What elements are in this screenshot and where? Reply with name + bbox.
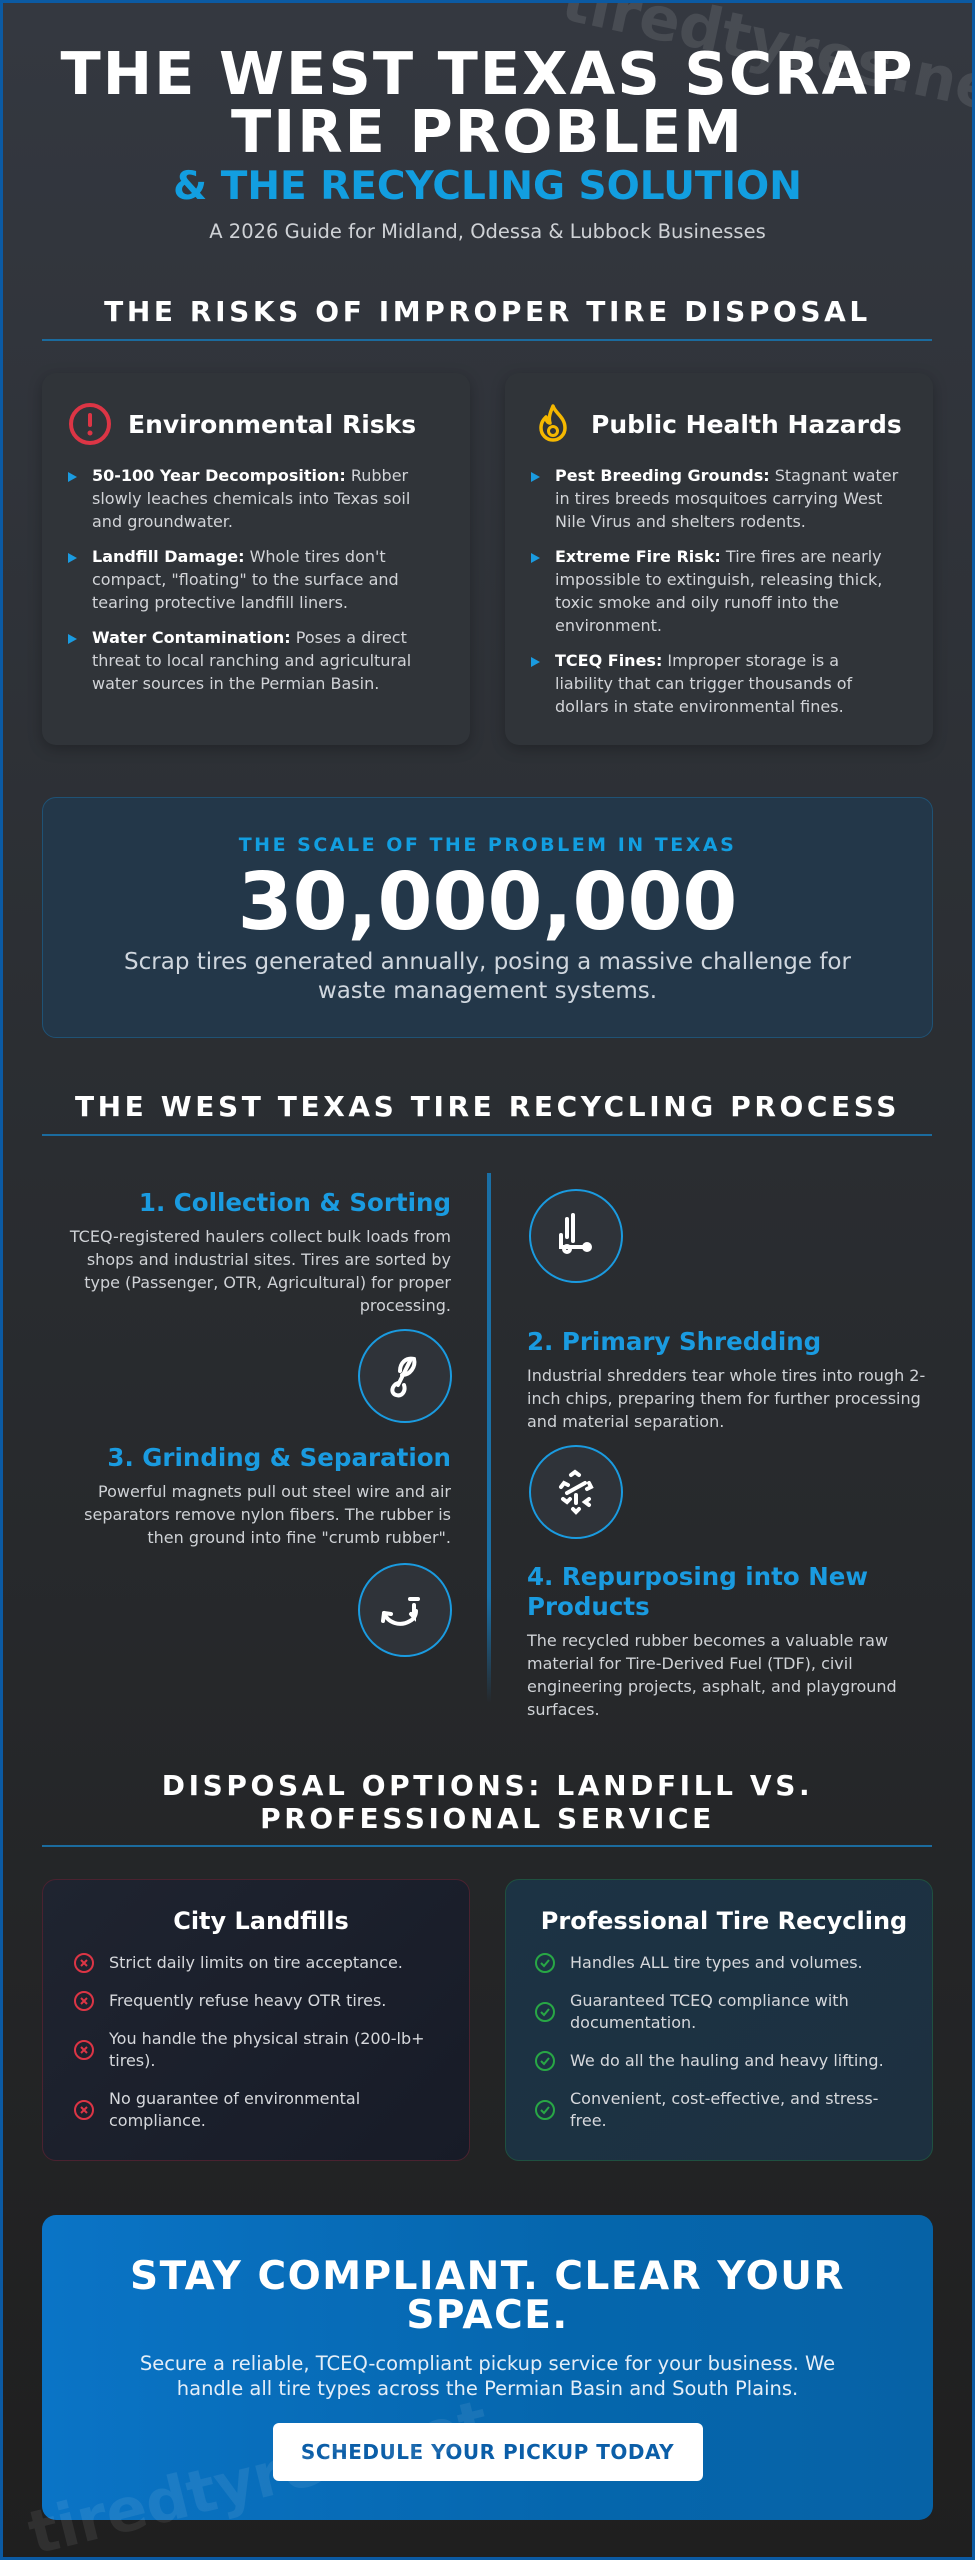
step 3: 3. Grinding & Separation (107, 1443, 451, 1472)
icon: fire (539, 404, 567, 442)
stat label: THE SCALE OF THE PROBLEM IN TEXAS (239, 834, 736, 856)
step 1 (70, 1188, 451, 1315)
step 4: The recycled rubber becomes a valuable raw material for Tire-Derived Fuel (TDF), civil engineering projects, asphalt, and playground surfaces. (527, 1631, 897, 1719)
step 4: 4. Repurposing into New Products (527, 1562, 868, 1621)
heading: environmental (69, 403, 416, 445)
step 3 (84, 1443, 451, 1547)
heading: health (539, 404, 902, 442)
icon: warning (69, 403, 111, 445)
heading: environmental: Environmental Risks (128, 410, 416, 438)
list: Frequently refuse heavy OTR tires. (109, 1991, 386, 2010)
CTA heading: STAY COMPLIANT. CLEAR YOUR SPACE. (130, 2254, 845, 2338)
subtitle blue: & THE RECYCLING SOLUTION (173, 164, 802, 209)
step 2: 2. Primary Shredding (527, 1327, 821, 1356)
list: Convenient, cost-effective, and stress-free. (570, 2089, 878, 2130)
step 1: 1. Collection & Sorting (139, 1188, 451, 1217)
heading: risks: THE RISKS OF IMPROPER TIRE DISPOSAL (104, 295, 871, 328)
tagline: A 2026 Guide for Midland, Odessa & Lubbock Businesses (209, 220, 766, 243)
bullets: 50-100 Year Decomposition: Rubber slowly leaches chemicals into Texas soil and groundwater. (92, 466, 410, 531)
CTA panel (42, 2215, 933, 2520)
bullets: Extreme Fire Risk: Tire fires are nearly impossible to extinguish, releasing thick, toxic smoke and oily runoff into the environment. (555, 547, 882, 635)
icon: separation arrows (529, 1445, 623, 1539)
step 2 (527, 1327, 925, 1431)
step 4 (526, 1562, 897, 1719)
list (535, 1953, 884, 2130)
bullets: TCEQ Fines: Improper storage is a liability that can trigger thousands of dollars in state environmental fines. (555, 651, 852, 716)
heading: process: THE WEST TEXAS TIRE RECYCLING PROCESS (75, 1090, 900, 1123)
bullets (531, 466, 898, 716)
panel: environmental risks (42, 373, 470, 745)
list: No guarantee of environmental compliance. (109, 2089, 360, 2130)
bullets: Landfill Damage: Whole tires don't compact, "floating" to the surface and tearing protective landfill liners. (92, 547, 399, 612)
step 3: Powerful magnets pull out steel wire and air separators remove nylon fibers. The rubber is then ground into fine "crumb rubber". (84, 1482, 451, 1547)
CTA button (272, 2423, 702, 2481)
step 2: Industrial shredders tear whole tires into rough 2-inch chips, preparing them for further processing and material separation. (527, 1366, 925, 1431)
stat caption: Scrap tires generated annually, posing a massive challenge for waste management systems. (124, 949, 851, 1004)
heading: Professional Tire Recycling (541, 1907, 907, 1935)
timeline line (487, 1173, 491, 1703)
panel: public health (505, 373, 933, 745)
list (74, 1953, 425, 2130)
CTA button: SCHEDULE YOUR PICKUP TODAY (301, 2440, 674, 2464)
list: Handles ALL tire types and volumes. (570, 1953, 863, 1972)
bullets: Pest Breeding Grounds: Stagnant water in tires breeds mosquitoes carrying West Nile Virus and shelters rodents. (555, 466, 898, 531)
title (60, 39, 914, 166)
list: Guaranteed TCEQ compliance with documentation. (570, 1991, 849, 2032)
stat panel (42, 797, 933, 1038)
CTA text: Secure a reliable, TCEQ-compliant pickup service for your business. We handle all tire types across the Permian Basin and South Plains. (140, 2352, 835, 2400)
step 1: TCEQ-registered haulers collect bulk loads from shops and industrial sites. Tires are sorted by type (Passenger, OTR, Agricultural) for proper processing. (70, 1227, 451, 1315)
icon: truck (529, 1189, 623, 1283)
icon: recycle leaf (358, 1329, 452, 1423)
list: You handle the physical strain (200-lb+ tires). (109, 2029, 425, 2070)
bullets (68, 466, 411, 693)
panel: professional recycling (505, 1879, 933, 2161)
title: TIRE PROBLEM (231, 97, 744, 166)
heading: disposal: DISPOSAL OPTIONS: LANDFILL VS. PROFESSIONAL SERVICE (162, 1769, 813, 1835)
stat number: 30,000,000 (238, 856, 737, 948)
heading: health: Public Health Hazards (591, 410, 902, 438)
title: THE WEST TEXAS SCRAP (60, 39, 914, 108)
list: We do all the hauling and heavy lifting. (570, 2051, 884, 2070)
heading: City Landfills (173, 1907, 349, 1935)
list: Strict daily limits on tire acceptance. (109, 1953, 403, 1972)
bullets: Water Contamination: Poses a direct threat to local ranching and agricultural water sources in the Permian Basin. (92, 628, 411, 693)
panel: city landfills (42, 1879, 470, 2161)
icon: magnet (358, 1563, 452, 1657)
